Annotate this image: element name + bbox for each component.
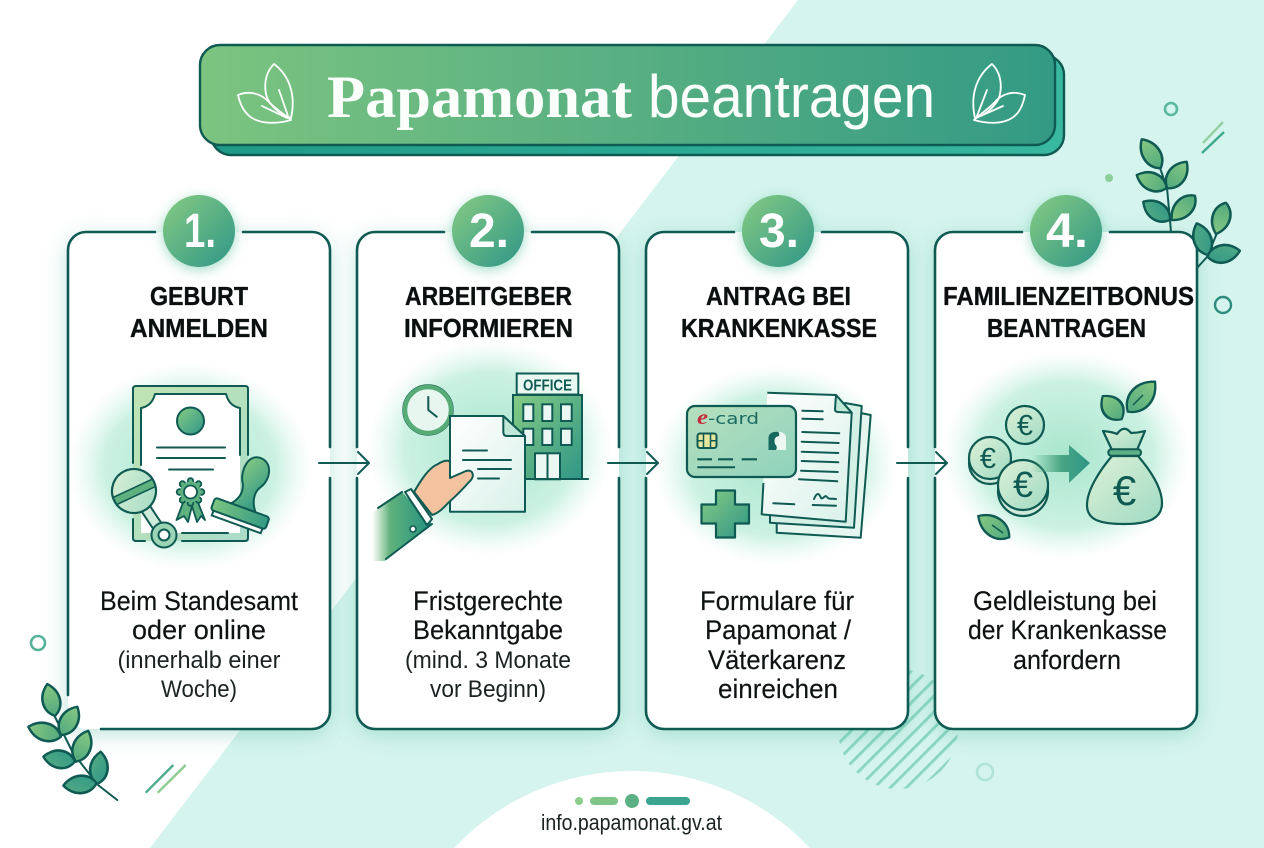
coin left: € — [980, 443, 996, 475]
coin top: € — [1017, 410, 1033, 442]
banner face — [200, 45, 1055, 145]
body text 2: Fristgerechte — [413, 586, 563, 616]
decorative striped circle — [839, 670, 958, 789]
document — [450, 416, 525, 512]
card base — [646, 232, 908, 729]
rattle — [105, 462, 176, 548]
heading 2: INFORMIEREN — [404, 315, 573, 343]
plus sign — [702, 490, 749, 538]
icon: euro coins, arrow and money bag — [942, 351, 1190, 559]
card base — [68, 232, 330, 729]
icon: certificate, rattle and stamp — [68, 363, 312, 571]
title banner — [200, 45, 1064, 155]
arrow 1 to 2 — [319, 452, 369, 474]
panel: step 2 — [357, 195, 619, 729]
body text 2 — [405, 586, 571, 703]
body text 3: Väterkarenz — [708, 645, 846, 675]
rosette — [176, 478, 205, 522]
transfer arrow — [1032, 445, 1090, 483]
card base — [935, 232, 1197, 729]
badge 4 — [1030, 195, 1102, 267]
badge 2: 2. — [469, 205, 509, 258]
heading 2: ARBEITGEBER — [405, 283, 572, 311]
body text 2: Bekanntgabe — [413, 615, 563, 645]
hand — [414, 461, 473, 515]
badge 3: 3. — [759, 205, 799, 258]
heading 4: BEANTRAGEN — [987, 315, 1146, 343]
title text light: beantragen — [648, 63, 935, 130]
office building: OFFICE — [523, 378, 572, 394]
card border — [646, 232, 908, 729]
coin front — [998, 460, 1048, 516]
body text 4 — [968, 586, 1167, 675]
body text 1: Woche) — [161, 676, 237, 703]
office building — [513, 374, 588, 479]
footer dots — [575, 794, 690, 808]
icon: left leaves — [238, 64, 293, 123]
body text 1 — [100, 586, 298, 703]
e-card: e — [697, 407, 708, 429]
body text 1: (innerhalb einer — [118, 647, 280, 674]
card border — [935, 232, 1197, 729]
heading 1: GEBURT — [150, 283, 248, 311]
plant: bottom left — [26, 682, 117, 800]
card border — [68, 232, 330, 729]
badge 3 — [742, 195, 814, 267]
card border — [357, 232, 619, 729]
cuff button — [410, 526, 416, 532]
body text 3 — [700, 586, 854, 704]
heading 3 — [681, 283, 877, 343]
panel: step 4 — [935, 195, 1197, 729]
body text 3: einreichen — [718, 674, 838, 704]
body text 1: oder online — [132, 615, 266, 645]
arrow 2 to 3 — [608, 452, 658, 474]
clock — [403, 385, 453, 435]
icon: right leaves — [973, 64, 1025, 123]
badge 4: 4. — [1046, 205, 1088, 258]
heading 4 — [943, 283, 1194, 343]
stamp — [209, 448, 288, 534]
card base — [357, 232, 619, 729]
badge 1 — [163, 195, 235, 267]
heading 4: FAMILIENZEITBONUS — [943, 283, 1194, 311]
coin top — [1006, 406, 1044, 444]
icon: office, clock, document and hand — [368, 340, 612, 561]
title text: Papamonat — [327, 64, 632, 130]
heading 3: KRANKENKASSE — [681, 315, 877, 343]
sleeve — [372, 492, 432, 561]
body text 4: Geldleistung bei — [973, 586, 1157, 616]
body text 3: Papamonat / — [705, 615, 851, 645]
e-card: -card — [708, 409, 759, 428]
arrow 3 to 4 — [897, 452, 947, 474]
panel: step 1 — [68, 195, 330, 729]
footer — [541, 794, 722, 835]
body text 2: vor Beginn) — [430, 676, 546, 703]
panel: step 3 — [646, 195, 908, 729]
money bag: € — [1113, 467, 1136, 514]
body text 3: Formulare für — [700, 586, 854, 616]
body text 1: Beim Standesamt — [100, 586, 298, 616]
body text 4: der Krankenkasse — [968, 615, 1167, 645]
icon: e-card, forms and plus — [654, 365, 898, 565]
plant: top right — [1133, 134, 1242, 268]
banner shadow layer — [211, 55, 1064, 155]
decorative rings, dots and dashes — [31, 103, 1231, 793]
heading 1 — [130, 283, 268, 343]
body text 2: (mind. 3 Monate — [405, 647, 571, 674]
body text 4: anfordern — [1013, 645, 1121, 675]
cuff — [405, 489, 432, 525]
coin front: € — [1013, 464, 1033, 505]
heading 2 — [404, 283, 573, 343]
footer white arc — [454, 771, 810, 848]
money leaves — [973, 374, 1163, 545]
heading 1: ANMELDEN — [130, 315, 268, 343]
money bag — [1087, 429, 1162, 524]
badge 1: 1. — [184, 205, 216, 258]
footer url: info.papamonat.gv.at — [541, 810, 722, 835]
e-card — [687, 406, 796, 477]
heading 3: ANTRAG BEI — [706, 283, 851, 311]
form stack — [762, 393, 871, 538]
badge 2 — [452, 195, 524, 267]
coin left — [969, 437, 1011, 484]
